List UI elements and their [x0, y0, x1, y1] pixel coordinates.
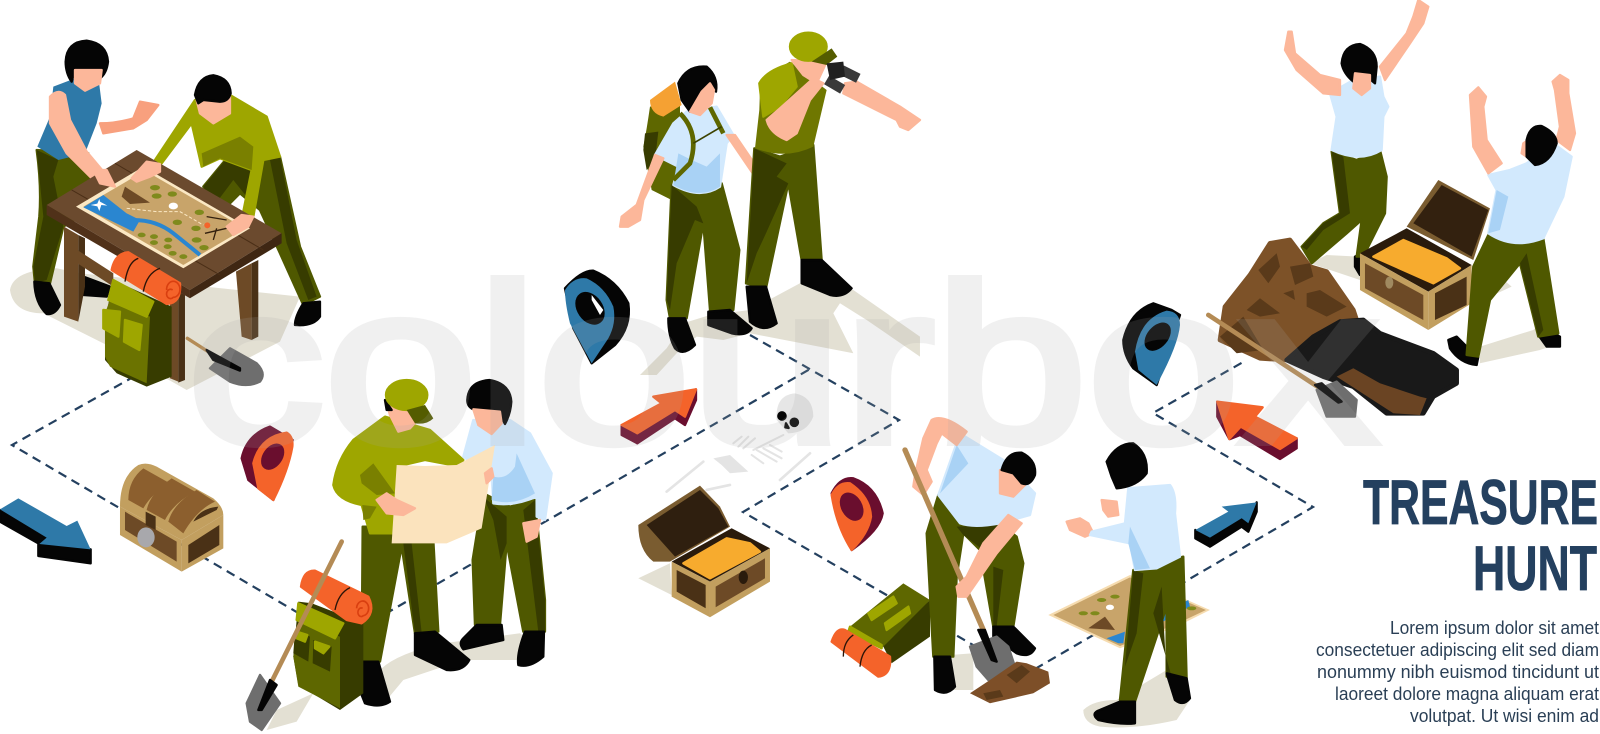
scene: planning at the table — [10, 41, 320, 390]
man in cap — [333, 380, 469, 705]
cheering man — [1448, 75, 1575, 365]
description text — [1316, 618, 1599, 726]
scene: digging — [832, 418, 1210, 727]
scene: scouting with binoculars — [620, 33, 920, 375]
closed treasure chest — [120, 464, 223, 572]
digging man — [913, 418, 1035, 693]
orange arrow centre — [622, 389, 696, 443]
description text: volutpat. Ut wisi enim ad — [1410, 706, 1599, 726]
hands — [377, 468, 493, 515]
dug-up mound of earth — [1220, 240, 1357, 367]
woman in blue shirt — [461, 380, 552, 666]
cheering woman — [1285, 0, 1428, 275]
standing woman from behind — [1067, 443, 1190, 724]
man in olive sweater — [155, 75, 320, 325]
title — [1363, 468, 1598, 604]
colourbox watermark: colourbox — [187, 238, 1377, 490]
digging shovel — [905, 450, 1022, 680]
dirt pile — [970, 662, 1050, 703]
open chest full of gold — [1360, 180, 1490, 330]
open treasure chest with gold — [638, 486, 770, 617]
map on the ground — [1048, 575, 1210, 648]
shovel in the ground — [1208, 315, 1357, 417]
blue location pin right — [1123, 303, 1180, 385]
orange location pin — [832, 478, 883, 550]
skeleton bones — [667, 393, 813, 492]
ground shadows — [1310, 255, 1560, 363]
small blue arrow — [1195, 502, 1257, 547]
orange arrow right — [1217, 402, 1297, 459]
ground shadow — [640, 283, 920, 375]
backpack on the ground — [832, 583, 930, 677]
big blue arrow — [0, 498, 91, 563]
woman with backpack — [620, 67, 775, 352]
dark hole in the ground — [1287, 320, 1457, 415]
long shovel — [247, 542, 342, 730]
blue location pin — [565, 271, 629, 363]
dashed route path — [12, 335, 1313, 669]
table — [47, 150, 282, 383]
man with binoculars — [746, 33, 920, 328]
description text: nonummy nibh euismod tincidunt ut — [1317, 662, 1599, 682]
scene: celebrating the find — [1208, 0, 1575, 417]
ground shadows — [950, 653, 1190, 727]
backpack with bedroll — [103, 252, 180, 387]
woman in blue top — [33, 41, 158, 314]
scene: reading the map — [247, 380, 552, 730]
small shovel — [187, 338, 263, 385]
backpack with bedroll — [293, 571, 371, 710]
ground shadows — [267, 633, 545, 730]
ground shadow — [10, 268, 300, 390]
treasure map on table — [76, 162, 253, 268]
red location pin — [242, 427, 293, 500]
paper map held up — [392, 445, 495, 543]
